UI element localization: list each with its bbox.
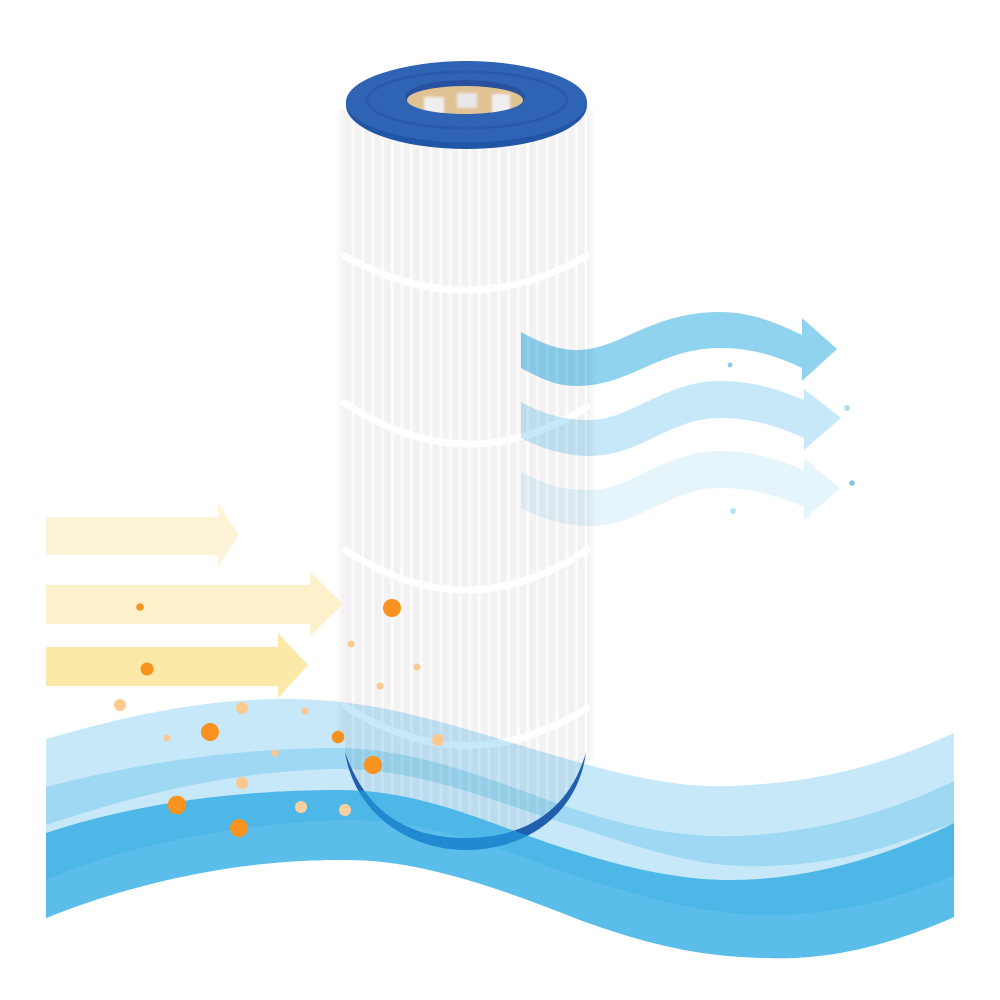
arrow: inflow top bbox=[46, 503, 239, 567]
debris particles (orange) bbox=[114, 599, 444, 837]
arrow: outflow top bbox=[521, 312, 837, 386]
wave: front band bbox=[46, 820, 954, 958]
filter cartridge body bbox=[335, 100, 597, 840]
arrow: outflow middle bbox=[521, 381, 841, 456]
wave: light stripe bbox=[46, 769, 954, 958]
blue filter end cap bbox=[346, 61, 587, 149]
wave: mid band bbox=[46, 748, 954, 958]
arrow: inflow bottom bbox=[46, 633, 308, 698]
clean water droplets bbox=[728, 362, 855, 514]
water: deep wave layers bbox=[46, 790, 954, 958]
filter bottom rim seen through water bbox=[358, 790, 528, 850]
filter bottom rim (dark) bbox=[345, 752, 586, 850]
wave: deep blue band bbox=[46, 790, 954, 958]
left inflow arrows (yellow) bbox=[46, 503, 343, 698]
water: light wave layers bbox=[46, 699, 954, 958]
arrow: inflow middle bbox=[46, 572, 343, 636]
arrow: outflow bottom bbox=[521, 451, 840, 526]
right outflow arrows (blue) bbox=[521, 312, 841, 526]
wave: lightest band bbox=[46, 699, 954, 958]
